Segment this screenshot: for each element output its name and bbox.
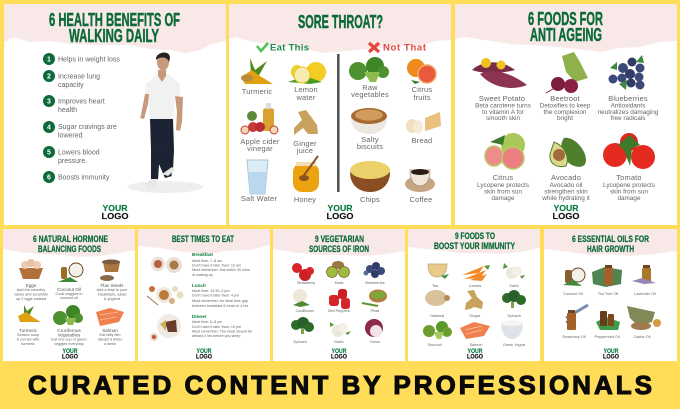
salmon (96, 308, 124, 346)
logo (326, 203, 354, 221)
broccoli: Eat one cup of green (51, 338, 87, 342)
turmeric: Turmeric (242, 87, 272, 96)
guava: Lycopene protects (477, 182, 529, 189)
panel: immunity foods (408, 229, 540, 361)
breakfast text: Ideal time: 7–8 am (192, 259, 222, 263)
breakfast text: Must remember: Eat within 30 mins (192, 268, 250, 272)
avocado: strengthen skin (544, 188, 588, 196)
dinner plates (150, 314, 181, 341)
tomato: damage (617, 195, 641, 202)
salmon: atleast 3 times (98, 338, 122, 342)
benefits list: 3 (47, 98, 51, 106)
logo: YOUR (468, 349, 483, 355)
beetroot (540, 52, 591, 122)
peas: Peas (371, 309, 379, 313)
panel: sore throat (229, 4, 451, 225)
logo: LOGO (603, 354, 619, 360)
breakfast text (192, 252, 250, 277)
logo (62, 349, 78, 360)
turmeric: turmeric (21, 342, 35, 346)
ginger juice: juice (296, 146, 313, 155)
heading: WALKING DAILY (69, 26, 159, 46)
coffee: Coffee (410, 195, 432, 204)
tomato: skin from sun (610, 188, 648, 196)
kiwi: Kiwis (335, 281, 344, 285)
panel: hair oils (544, 229, 677, 361)
salty biscuits (351, 108, 387, 151)
lunch text: between breakfast & lunch is 4 hrs (192, 304, 249, 308)
coconut oil: coconut oil (60, 296, 78, 300)
benefits list: Lowers blood (58, 150, 100, 156)
ginger juice (293, 110, 318, 155)
logo: LOGO (331, 354, 347, 360)
benefits list: 1 (47, 56, 51, 64)
turmeric: Season soup (17, 333, 39, 337)
dinner text: atleast 3 hrs before you sleep (192, 334, 240, 338)
logo: LOGO (552, 211, 580, 221)
eggs: Add the smoothy (17, 288, 45, 292)
heading: BALANCING FOODS (38, 244, 101, 254)
heading: 9 VEGETARIAN (315, 234, 364, 244)
turmeric: & curries with (17, 338, 39, 342)
panel: best times to eat (138, 229, 270, 361)
panel: anti ageing (455, 4, 677, 225)
not that: Not That (383, 42, 427, 54)
salmon: Salmon (470, 343, 482, 347)
beetroot: Detoxifies to keep (540, 102, 591, 110)
benefits list: Helps in weight loss (58, 56, 120, 64)
benefits list: Sugar cravings are (58, 124, 117, 131)
turmeric (241, 58, 273, 96)
logo: LOGO (326, 211, 354, 221)
spinach: Spinach (507, 314, 521, 318)
salmon: a week (104, 342, 116, 346)
logo (196, 349, 212, 360)
eggs: up 2 eggs instead (16, 297, 46, 301)
garlic: Garlic (509, 284, 519, 288)
honey jar: Honey (294, 195, 316, 204)
salmon: Salmon (102, 328, 118, 333)
turmeric: Turmeric (19, 328, 38, 333)
logo: YOUR (604, 349, 619, 355)
broccoli (51, 305, 87, 346)
logo: LOGO (102, 211, 129, 221)
flax seeds (97, 260, 128, 301)
tomato (603, 133, 655, 202)
flax seeds: Add a tbsp to your (97, 288, 128, 292)
sweet potato: Beta carotene turns (475, 102, 531, 110)
benefits list: pressure. (58, 158, 87, 165)
ginger: Ginger (469, 314, 481, 318)
avocado: Avocado oil (550, 182, 582, 189)
benefits list: 2 (47, 74, 51, 80)
heading: BEST TIMES TO EAT (172, 234, 234, 244)
broccoli: Cruciferous (57, 328, 81, 333)
carrots: Carrots (469, 284, 481, 288)
dinner text: Don't have it later than: 10 pm (192, 325, 241, 329)
logo: YOUR (332, 349, 347, 355)
salt water glass: Salt Water (241, 194, 277, 203)
eat this: Eat This (270, 42, 309, 54)
heading (528, 9, 603, 45)
tea: Tea (432, 284, 439, 288)
breakfast text: Don't have it later than: 10 am (192, 264, 241, 268)
benefits list: Improves heart (58, 98, 105, 106)
blueberries (598, 55, 659, 122)
eggs (14, 259, 48, 301)
heading: 6 HEALTH BENEFITS OF (49, 10, 180, 30)
breakfast plates (151, 257, 182, 273)
divider (337, 54, 340, 192)
blueberries: Blueberries (608, 94, 648, 103)
citrus fruits: fruits (413, 93, 431, 102)
panel: walking benefits (4, 4, 226, 225)
rosemary oil: Rosemary Oil (562, 335, 586, 339)
heading (33, 234, 108, 254)
citrus fruits (407, 59, 436, 102)
benefits list: 6 (47, 174, 51, 182)
benefits list: 4 (47, 124, 51, 132)
benefits list: Increase lung (58, 74, 100, 80)
banner tagline: CURATED CONTENT BY PROFESSIONALS (28, 370, 652, 400)
logo: LOGO (467, 354, 483, 360)
sweet potato (472, 58, 531, 122)
coconut oil: Coconut Oil (563, 292, 583, 296)
ginger juice: Ginger (293, 139, 317, 148)
lunch text: Must remember: An ideal time gap (192, 299, 248, 303)
bread (406, 112, 441, 145)
garlic: Garlic (334, 340, 344, 344)
eggs: varies and scramble (14, 292, 48, 296)
guava: damage (491, 195, 515, 202)
panel: hormone foods (3, 229, 135, 361)
heading (49, 10, 180, 46)
logo: LOGO (196, 354, 212, 360)
oatmeal: Oatmeal (430, 314, 444, 318)
tomato: Lycopene protects (603, 182, 655, 189)
logo: YOUR (196, 349, 212, 355)
beetroot: the complexion (544, 109, 587, 116)
logo: LOGO (62, 354, 78, 360)
coconut oil: Coconut Oil (57, 287, 81, 292)
flax seeds: breakfasts, salad (98, 292, 126, 296)
heading (309, 234, 369, 254)
salt water glass (241, 160, 277, 203)
logo (552, 203, 580, 221)
blueberries: neutralizes damaging (598, 109, 659, 116)
panel: iron sources (273, 229, 405, 361)
coconut oil (55, 263, 83, 300)
citrus fruits: Citrus (412, 85, 432, 94)
raw vegetables: vegetables (351, 90, 389, 99)
blueberries: Blueberries (365, 281, 385, 285)
heading: 9 FOODS TO (455, 231, 495, 241)
peppermint oil: Peppermint Oil (594, 335, 620, 339)
honey jar (293, 156, 319, 204)
raw vegetables (349, 57, 389, 99)
broccoli: Vegetables (58, 332, 81, 338)
avocado: Avocado (551, 173, 581, 182)
guava (477, 133, 529, 202)
apple cider vinegar (240, 103, 280, 153)
greek yogurt: Greek Yogurt (503, 343, 526, 347)
bell peppers: Bell Peppers (328, 309, 350, 313)
logo: YOUR (102, 203, 128, 213)
dinner text: Dinner (192, 314, 207, 319)
avocado: while hydrating it (541, 195, 590, 202)
cauliflower: Cauliflower (296, 309, 315, 313)
logo (603, 349, 619, 360)
lunch text: Ideal time: 12:30–2 pm (192, 289, 230, 293)
heading (434, 231, 515, 251)
strawberry: Strawberry (297, 281, 315, 285)
heading: SORE THROAT? (298, 12, 383, 32)
flax seeds: & yoghurt (104, 297, 121, 301)
heading: 6 NATURAL HORMONE (33, 234, 108, 244)
benefits list: 5 (47, 150, 51, 156)
logo (331, 349, 347, 360)
lemon water: Lemon (294, 85, 318, 94)
salty biscuits: biscuits (357, 142, 383, 151)
eggs: Eggs (26, 283, 37, 288)
heading: 6 ESSENTIAL OILS FOR (572, 234, 649, 244)
lunch plates (147, 286, 184, 305)
logo: YOUR (328, 203, 352, 213)
blueberries: free radicals (611, 115, 645, 122)
tomato: Tomato (616, 173, 642, 182)
beetroot: Beetroot (550, 94, 580, 103)
apple cider vinegar: Apple cider (240, 137, 280, 146)
heading: 6 FOODS FOR (528, 9, 603, 29)
benefits list (43, 53, 120, 183)
heading: HAIR GROWTH (587, 244, 634, 254)
benefits list: Boosts immunity (58, 174, 110, 182)
avocado (541, 138, 590, 202)
broccoli: Broccoli (428, 343, 442, 347)
logo: YOUR (554, 203, 578, 213)
apple cider vinegar: vinegar (247, 144, 273, 153)
sweet potato: Sweet Potato (479, 94, 525, 103)
broccoli: veggies everyday (54, 342, 84, 346)
guava: Citrus (493, 173, 513, 182)
sweet potato: to vitamin A for (482, 109, 525, 116)
heading: SOURCES OF IRON (309, 244, 369, 254)
lemon water (288, 62, 326, 102)
salty biscuits: Salty (361, 135, 379, 144)
blueberries: Antioxidants (611, 102, 645, 110)
bread: Bread (412, 136, 432, 145)
heading: ANTI AGEING (530, 25, 602, 45)
coconut oil: Cook veggies in (55, 292, 83, 296)
lavender oil: Lavender Oil (634, 292, 656, 296)
lemon water: water (295, 93, 316, 102)
chips: Chips (360, 195, 380, 204)
logo (102, 203, 129, 221)
logo (467, 349, 483, 360)
heading (572, 234, 649, 254)
onion: Onion (370, 340, 380, 344)
flax seeds: Flax Seeds (101, 283, 124, 288)
dinner text: Ideal time: 6–8 pm (192, 320, 222, 324)
dinner text (192, 314, 252, 338)
sweet potato: smooth skin (486, 115, 520, 122)
raw vegetables: Raw (362, 83, 378, 92)
spinach: Spinach (293, 340, 307, 344)
guava: skin from sun (484, 188, 522, 196)
logo: YOUR (62, 349, 78, 355)
lunch text (192, 283, 249, 308)
benefits list: capacity (58, 82, 84, 89)
beetroot: bright (557, 115, 573, 122)
dinner text: Must remember: The meal should be (192, 330, 252, 334)
turmeric (17, 305, 41, 346)
chips (350, 161, 390, 204)
walking man (127, 52, 203, 193)
castor oil: Castor Oil (634, 335, 651, 339)
coffee (405, 169, 435, 204)
breakfast text: Breakfast (192, 252, 213, 257)
lunch text: Don't have it later than: 4 pm (192, 294, 239, 298)
benefits list: health (58, 107, 77, 114)
tea tree oil: Tea Tree Oil (598, 292, 618, 296)
lunch text: Lunch (192, 283, 206, 288)
benefits list: lowered (58, 132, 83, 140)
breakfast text: of waking up (192, 273, 213, 277)
salmon: Eat fatty fish (100, 333, 120, 337)
heading: BOOST YOUR IMMUNITY (434, 241, 515, 251)
